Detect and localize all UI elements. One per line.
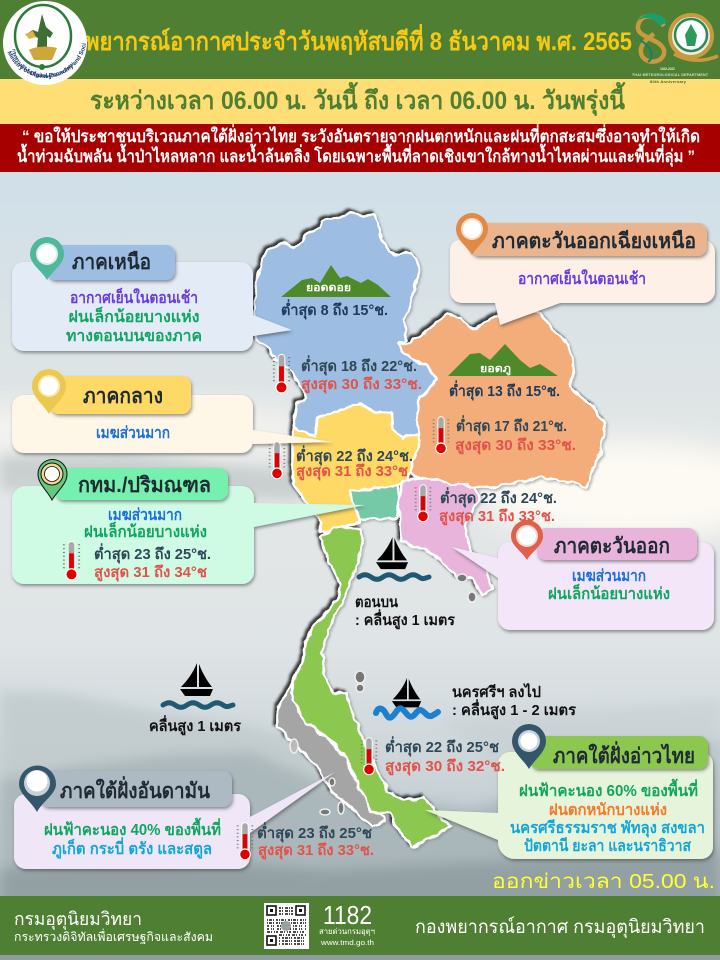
warning band xyxy=(0,124,720,172)
temperature: northeast: ต่ำสุด 17 ถึง 21°ช. xyxy=(456,415,567,436)
footer: hotline: www.tmd.go.th xyxy=(320,938,374,947)
Bangkok text: ฝนเล็กน้อยบางแห่ง xyxy=(84,520,207,541)
temperature: Andaman: สูงสุด 31 ถึง 33°ช. xyxy=(258,841,374,860)
mountain: Phu peaks: ยอดภู xyxy=(480,364,512,376)
Bangkok header tab xyxy=(55,468,228,500)
logo: 80th anniversary: 1942-2022 xyxy=(660,67,675,71)
callout: gulf south xyxy=(425,724,713,859)
icon: orange pin xyxy=(456,213,488,255)
label: upper gulf waves xyxy=(355,594,456,630)
temperature: northeast: สูงสุด 30 ถึง 33°ช. xyxy=(455,436,576,455)
temperature: north: ต่ำสุด 18 ถึง 22°ช. xyxy=(301,355,417,376)
icon: boat upper gulf xyxy=(359,537,429,579)
region: northeast xyxy=(398,305,605,487)
callout: Bangkok xyxy=(12,460,365,584)
icon: thermometer Bangkok xyxy=(63,541,80,581)
logo: 80th anniversary: 80th Anniversary xyxy=(650,79,687,84)
temperature: gulf south: สูงสุด 30 ถึง 32°ช. xyxy=(385,757,505,776)
temperature: central: ต่ำสุด 22 ถึง 24°ช. xyxy=(296,445,413,466)
issue time: ออกข่าวเวลา 05.00 น. xyxy=(492,871,715,893)
logo: 80th anniversary xyxy=(632,13,718,84)
region: central xyxy=(293,404,420,532)
mountain: Doi peaks: ยอดดอย xyxy=(306,283,351,294)
gulf south text: นครศรีธรรมราช พัทลุง สงขลา xyxy=(510,818,705,838)
central title: ภาคกลาง xyxy=(83,385,163,408)
header band xyxy=(0,0,720,79)
icon: green pin xyxy=(38,460,67,500)
Bangkok text: เมฆส่วนมาก xyxy=(108,507,182,524)
gulf south header tab xyxy=(530,736,708,769)
temperature: Doi peaks: ต่ำสุด 8 ถึง 15°ช. xyxy=(281,299,388,320)
footer: department name: กระทรวงดิจิทัลเพื่อเศรษฐกิจและสังคม xyxy=(14,928,213,944)
region: Bangkok xyxy=(350,485,398,520)
temperature: northeast xyxy=(433,415,576,455)
gulf south text: ปัตตานี ยะลา และนราธิวาส xyxy=(524,836,691,855)
temperature: north xyxy=(273,354,422,394)
temperature: east xyxy=(415,484,557,526)
label: lower gulf waves xyxy=(452,682,577,720)
warning text xyxy=(17,124,700,167)
icon: slate pin xyxy=(512,724,546,769)
footer: department name xyxy=(14,909,213,944)
temperature: Phu peaks: ต่ำสุด 13 ถึง 15°ช. xyxy=(449,380,560,401)
gulf south title: ภาคใต้ฝั่งอ่าวไทย xyxy=(553,740,695,768)
central header tab xyxy=(50,376,191,414)
map of Thailand xyxy=(254,213,605,847)
footer: hotline: สายด่วนกรมอุตุฯ xyxy=(319,927,375,936)
footer band xyxy=(0,896,720,960)
Andaman text: ฝนฟ้าคะนอง 40% ของพื้นที่ xyxy=(44,817,221,839)
gulf south text xyxy=(510,778,705,855)
icon: teal pin xyxy=(30,237,64,280)
temperature: east: ต่ำสุด 22 ถึง 24°ช. xyxy=(440,487,557,508)
callout: east xyxy=(452,520,714,630)
northeast header tab xyxy=(470,223,707,256)
north header tab xyxy=(47,245,175,280)
callout: northeast xyxy=(450,213,715,325)
east header tab xyxy=(537,528,697,560)
temperature: gulf south: ต่ำสุด 22 ถึง 25°ช xyxy=(385,736,499,757)
footer: department name: กรมอุตุนิยมวิทยา xyxy=(14,909,142,930)
east text xyxy=(548,568,670,603)
callout: Andaman south xyxy=(14,766,335,869)
label: upper gulf waves: ตอนบน xyxy=(355,594,399,611)
title: พยากรณ์อากาศประจำวันพฤหัสบดีที่ 8 ธันวาคม พ.ศ. 2565 xyxy=(85,24,632,56)
north text: ฝนเล็กน้อยบางแห่ง xyxy=(68,305,200,326)
Andaman header tab xyxy=(40,771,232,807)
north text: ทางตอนบนของภาค xyxy=(66,328,202,345)
temperature: central: สูงสุด 31 ถึง 33°ช xyxy=(296,462,408,481)
footer: hotline: 1182 xyxy=(323,900,372,930)
time band xyxy=(0,79,720,124)
callout: central xyxy=(12,369,333,453)
time range heading: ระหว่างเวลา 06.00 น. วันนี้ ถึง เวลา 06.00 น. วันพรุ่งนี้ xyxy=(90,81,626,117)
logo: 80th anniversary: THAI METEOROLOGICAL DEPARTMENT xyxy=(632,73,709,77)
central text: เมฆส่วนมาก xyxy=(96,425,170,442)
icon: boat lower gulf xyxy=(376,678,438,718)
north text: อากาศเย็นในตอนเช้า xyxy=(70,286,198,307)
Andaman text: ภูเก็ต กระบี่ ตรัง และสตูล xyxy=(52,837,212,860)
east text: เมฆส่วนมาก xyxy=(572,568,646,585)
Bangkok text: สูงสุด 31 ถึง 34°ช xyxy=(94,563,207,582)
Andaman text xyxy=(44,817,221,860)
label: lower gulf waves: นครศรีฯ ลงไป xyxy=(452,682,541,701)
gulf south text: ฝนฟ้าคะนอง 60% ของพื้นที่ xyxy=(519,778,698,800)
mountain: Phu peaks xyxy=(448,344,558,376)
footer: division name: กองพยากรณ์อากาศ กรมอุตุนิยมวิทยา xyxy=(415,916,705,939)
gulf south text: ฝนตกหนักบางแห่ง xyxy=(549,801,667,819)
icon: yellow pin xyxy=(32,369,66,414)
region: gulf south xyxy=(292,527,450,847)
temperature: Andaman: ต่ำสุด 23 ถึง 25°ช xyxy=(257,822,372,843)
mountain: Doi peaks xyxy=(281,265,391,297)
icon: boat Andaman xyxy=(163,663,233,707)
northeast title: ภาคตะวันออกเฉียงเหนือ xyxy=(492,229,696,253)
logo: ministry seal: กระทรวงดิจิทัลเพื่อเศรษฐกิจและสังคม xyxy=(12,49,74,80)
temperature: east: สูงสุด 31 ถึง 33°ช. xyxy=(439,507,555,526)
islands xyxy=(290,574,476,815)
Andaman title: ภาคใต้ฝั่งอันดามัน xyxy=(60,775,211,803)
temperature: north: สูงสุด 30 ถึง 33°ช. xyxy=(301,375,422,394)
label: Andaman waves: คลื่นสูง 1 เมตร xyxy=(149,715,242,736)
label: upper gulf waves: : คลื่นสูง 1 เมตร xyxy=(355,609,456,630)
temperature: gulf south xyxy=(361,736,505,776)
region: north xyxy=(254,213,437,438)
icon: red pin xyxy=(511,520,543,560)
Bangkok text: ต่ำสุด 23 ถึง 25°ช. xyxy=(94,543,211,564)
Bangkok title: กทม./ปริมณฑล xyxy=(78,474,211,497)
east text: ฝนเล็กน้อยบางแห่ง xyxy=(548,582,670,603)
north title: ภาคเหนือ xyxy=(72,250,151,274)
north text xyxy=(66,286,202,345)
label: lower gulf waves: : คลื่นสูง 1 - 2 เมตร xyxy=(452,699,577,720)
footer: hotline xyxy=(319,900,375,947)
icon: dark pin xyxy=(19,766,56,812)
temperature: central xyxy=(269,441,413,481)
region: east xyxy=(398,478,492,596)
northeast text: อากาศเย็นในตอนเช้า xyxy=(518,267,646,288)
region: Andaman south xyxy=(277,683,385,826)
east title: ภาคตะวันออก xyxy=(554,535,670,558)
footer: QR code xyxy=(264,903,309,949)
Bangkok text xyxy=(84,507,211,582)
temperature: Andaman xyxy=(237,822,374,860)
callout: north xyxy=(12,237,292,351)
